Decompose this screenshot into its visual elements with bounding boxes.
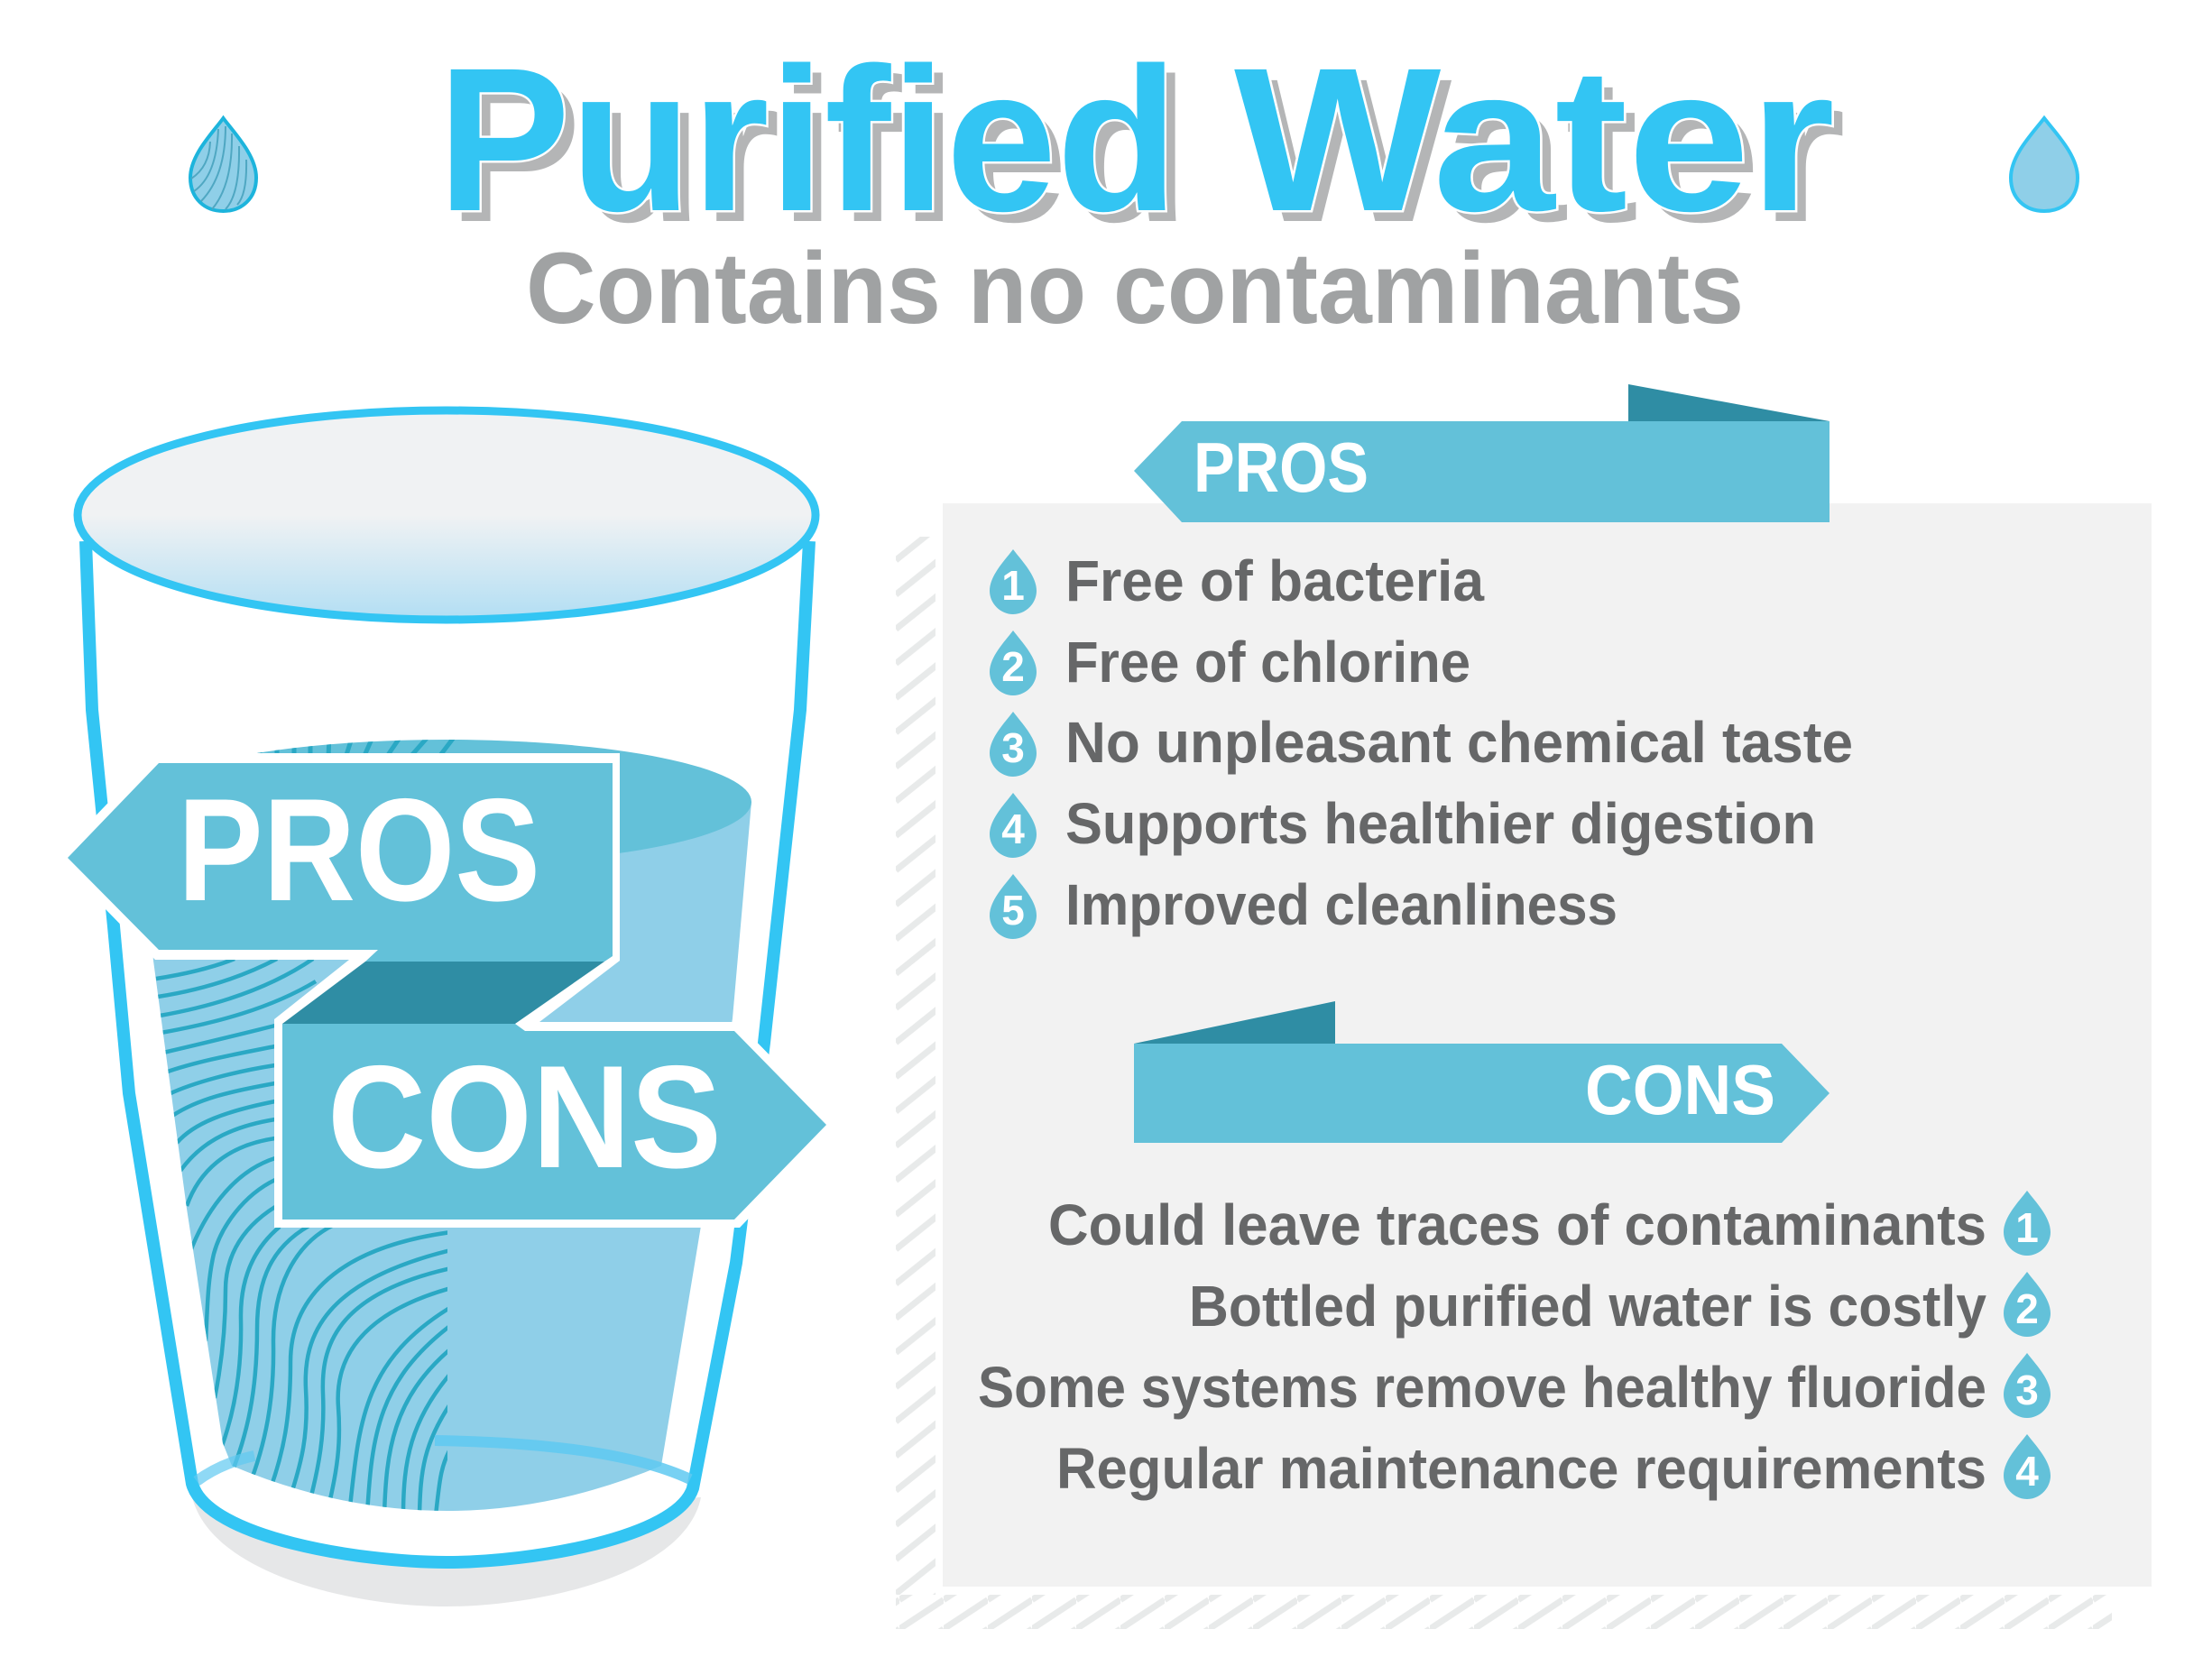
water wave hatching: [156, 959, 451, 1515]
pro item 1: Free of bacteria: [1065, 548, 1484, 613]
title: Purified Water: Water: [1245, 37, 1846, 265]
water surface: [142, 740, 751, 864]
pros and cons banner: PROS: [178, 769, 540, 932]
title: Purified Water: Water: [1234, 26, 1835, 254]
glass shadow: [192, 1497, 701, 1606]
pro item 2: Free of chlorine: [1065, 630, 1470, 695]
con item 2: 2: [2015, 1285, 2039, 1332]
ribbon: pros: [1134, 384, 1830, 522]
ribbon: cons: [1134, 1001, 1830, 1143]
pro item 4: 4: [1001, 805, 1025, 852]
con item 4: 4: [2015, 1448, 2039, 1495]
hatched panel shadow: [896, 537, 2112, 1629]
list: cons: [978, 1191, 2051, 1501]
subtitle: Contains no contaminants: [526, 232, 1744, 345]
pro item 3: 3: [1001, 724, 1025, 771]
water body: [142, 802, 751, 1511]
ribbon: pros: PROS: [1194, 428, 1369, 507]
con item 2: Bottled purified water is costly: [1189, 1274, 1986, 1339]
glass base back rim: right: [435, 1440, 690, 1479]
glass rim: [78, 410, 816, 620]
pro item 2: 2: [1001, 643, 1025, 690]
icon: hatched water drop: [190, 118, 256, 211]
pro item 3: No unpleasant chemical taste: [1065, 710, 1853, 775]
glass illustration: [55, 410, 838, 1606]
pros and cons banner: CONS: [327, 1035, 722, 1199]
glass base back rim: left: [197, 1456, 254, 1481]
con item 3: Some systems remove healthy fluoride: [978, 1355, 1986, 1420]
pro item 5: 5: [1001, 887, 1025, 934]
pros and cons banner: [55, 753, 838, 1228]
con item 4: Regular maintenance requirements: [1056, 1436, 1986, 1501]
water surface hatch marks: [258, 740, 455, 753]
icon: plain water drop: [2011, 118, 2078, 211]
ribbon: cons: CONS: [1585, 1050, 1775, 1129]
panel: pros and cons background: [943, 503, 2152, 1587]
con item 3: 3: [2015, 1367, 2039, 1413]
title: Purified Water: Purified: [448, 37, 1189, 265]
con item 1: 1: [2015, 1204, 2039, 1251]
list: pros: [990, 548, 1853, 939]
title: Purified Water: Purified: [438, 26, 1178, 254]
title: Purified Water: [438, 26, 1846, 265]
pro item 5: Improved cleanliness: [1065, 872, 1618, 937]
pro item 4: Supports healthier digestion: [1065, 791, 1816, 856]
pro item 1: 1: [1001, 562, 1025, 609]
con item 1: Could leave traces of contaminants: [1048, 1192, 1986, 1257]
glass body outline: [86, 541, 809, 1562]
